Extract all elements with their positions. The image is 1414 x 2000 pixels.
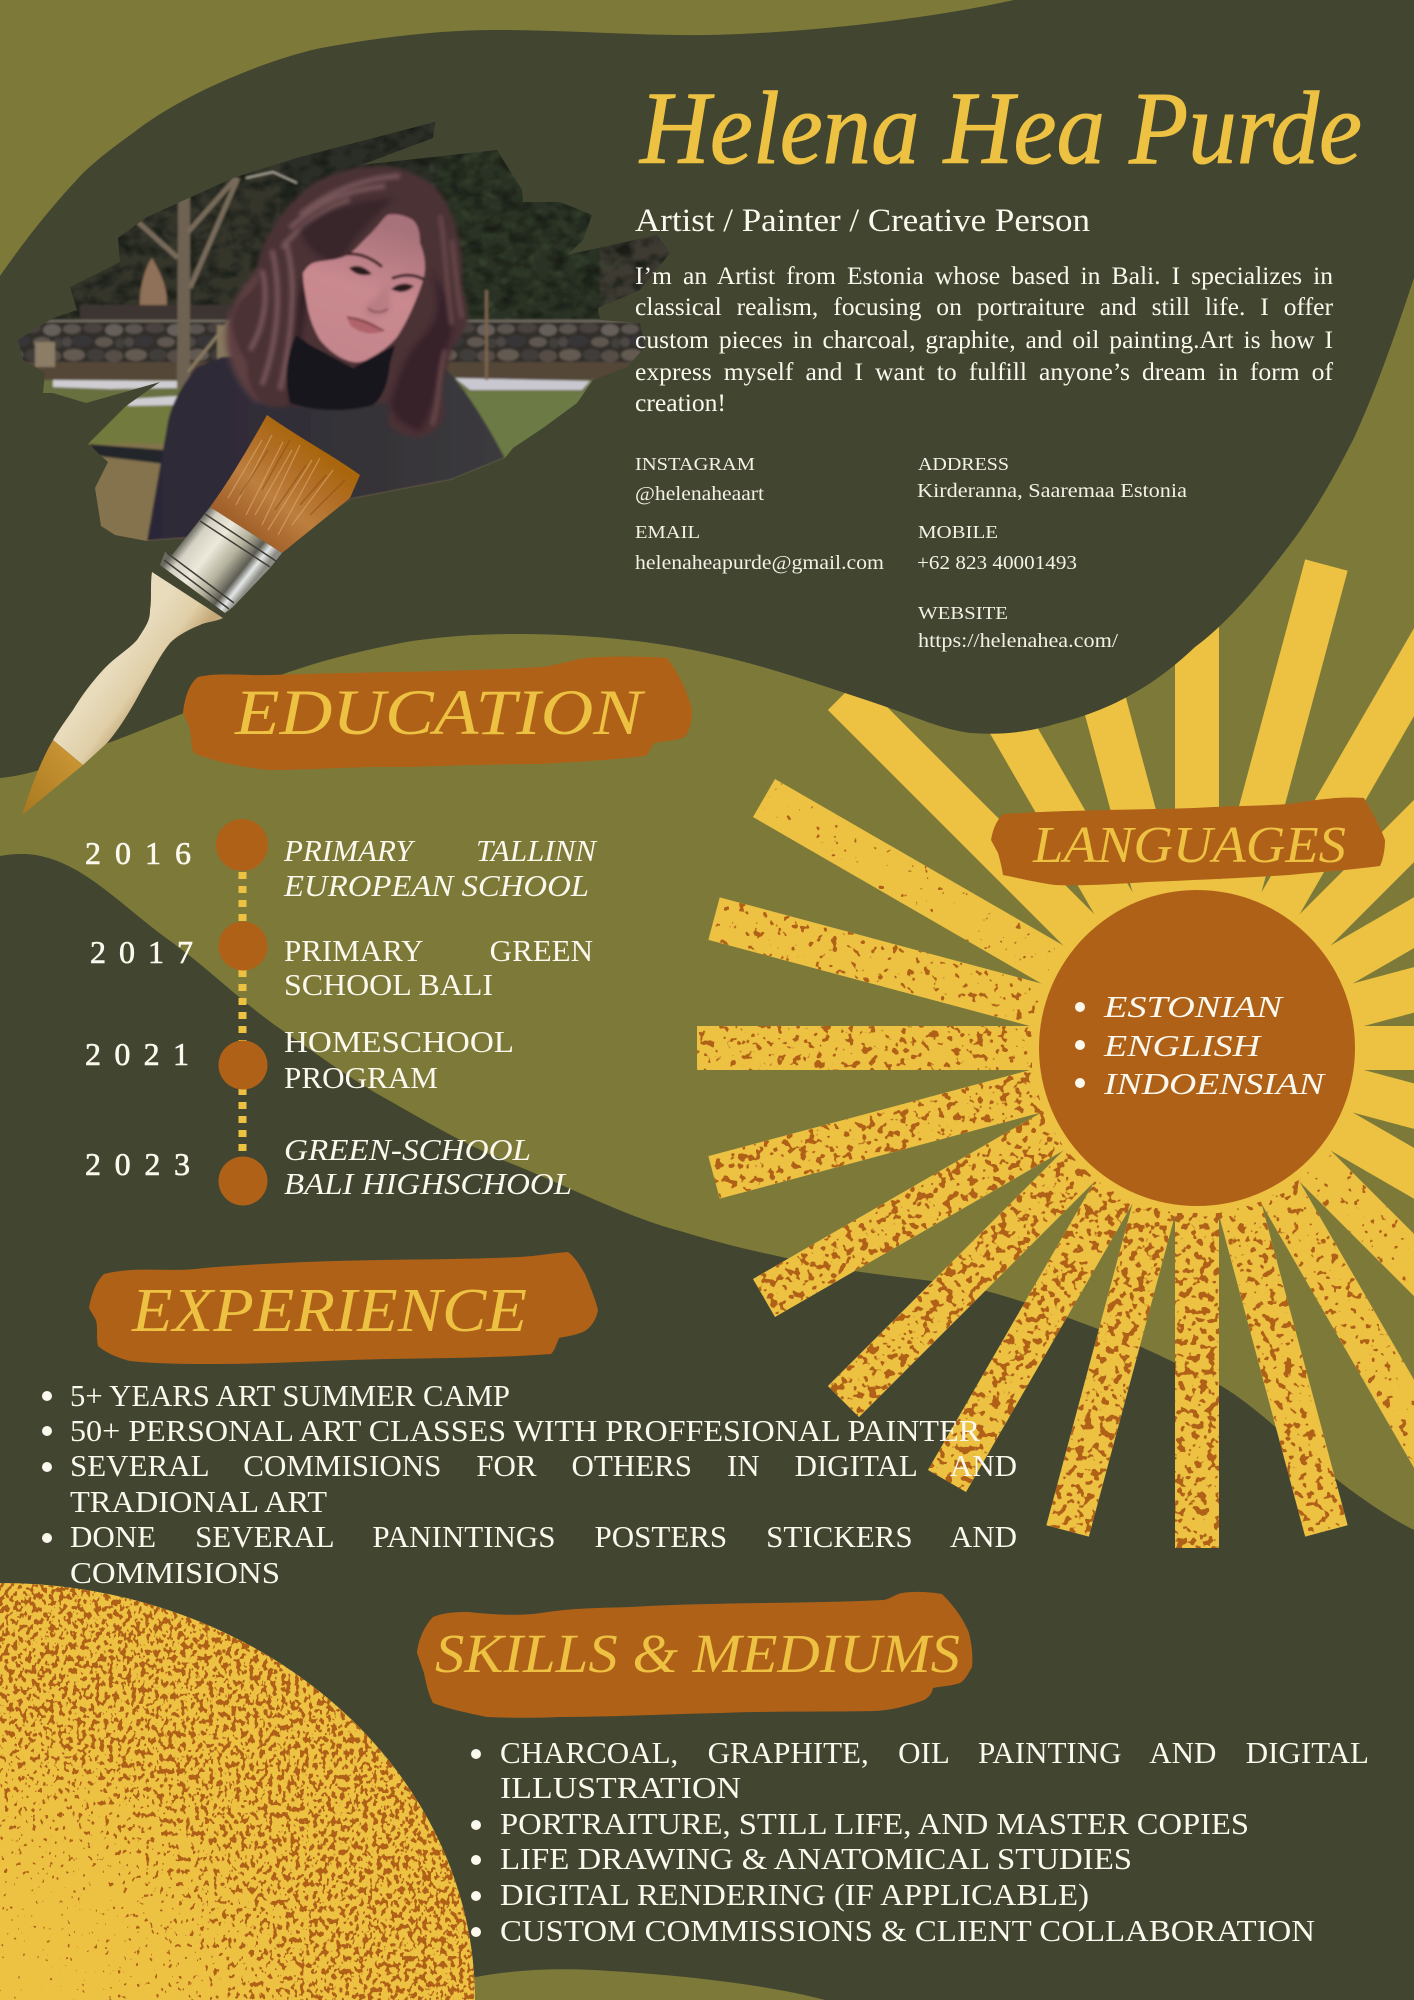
contact details: https://helenahea.com/ (918, 630, 1118, 652)
contact details (635, 454, 1187, 652)
text: creation! (635, 388, 726, 417)
skills heading (417, 1592, 972, 1718)
timeline years (85, 835, 193, 1182)
text: custom pieces in charcoal, graphite, and oil painting.Art is how I (635, 325, 1333, 354)
timeline schools: HOMESCHOOL (284, 1024, 514, 1059)
skills list: LIFE DRAWING & ANATOMICAL STUDIES (500, 1841, 1132, 1876)
experience heading (89, 1252, 598, 1364)
skills list: ILLUSTRATION (500, 1770, 741, 1805)
timeline dots (216, 819, 268, 1206)
paintbrush icon (22, 415, 360, 815)
timeline schools: EUROPEAN SCHOOL (283, 868, 589, 903)
portrait: sweater (147, 356, 505, 541)
background hump at bottom (470, 1969, 825, 2000)
timeline schools: PROGRAM (284, 1060, 438, 1095)
languages list: INDOENSIAN (1103, 1066, 1327, 1101)
name title: Helena Hea Purde (638, 71, 1362, 186)
subtitle: Artist / Painter / Creative Person (635, 203, 1090, 239)
skills heading: SKILLS & MEDIUMS (435, 1623, 960, 1684)
timeline years: 2016 (85, 835, 191, 871)
skills list: DIGITAL RENDERING (IF APPLICABLE) (500, 1877, 1089, 1912)
experience item: paintings: DONE SEVERAL PANINTINGS POSTERS STICKERS AND (70, 1519, 1017, 1554)
education heading (183, 656, 692, 770)
contact details: MOBILE (918, 522, 998, 542)
timeline connector (238, 872, 246, 1160)
experience item: commissions: SEVERAL COMMISIONS FOR OTHERS IN DIGITAL AND (70, 1448, 1017, 1483)
timeline schools: SCHOOL BALI (284, 967, 493, 1002)
timeline entry: primary green: PRIMARY GREEN (284, 933, 593, 968)
brush tip (22, 740, 83, 815)
languages list (1075, 989, 1327, 1101)
contact details: WEBSITE (918, 603, 1008, 623)
top dark blob (0, 0, 1414, 778)
timeline years: 2021 (85, 1036, 189, 1072)
experience list: TRADIONAL ART (70, 1484, 327, 1519)
skills item: charcoal: CHARCOAL, GRAPHITE, OIL PAINTING AND DIGITAL (500, 1735, 1369, 1770)
sun rays (697, 548, 1414, 1548)
contact details: INSTAGRAM (635, 454, 755, 474)
portrait: face (303, 214, 425, 362)
sun disc (1039, 890, 1355, 1206)
skills list (471, 1749, 1315, 1948)
experience list: 50+ PERSONAL ART CLASSES WITH PROFFESIONAL PAINTER (70, 1413, 980, 1448)
timeline schools: BALI HIGHSCHOOL (284, 1166, 572, 1201)
sun ray speckle texture (697, 779, 1414, 1548)
bottom-left textured sun (0, 1583, 475, 2000)
portrait: hair (226, 166, 468, 437)
experience list (42, 1378, 980, 1590)
timeline schools (283, 868, 589, 1201)
skills list: PORTRAITURE, STILL LIFE, AND MASTER COPIES (500, 1806, 1249, 1841)
languages heading: LANGUAGES (1032, 817, 1346, 874)
timeline years: 2023 (85, 1146, 190, 1182)
contact details: +62 823 40001493 (917, 552, 1077, 574)
contact details: helenaheapurde@gmail.com (635, 552, 884, 574)
languages list: ENGLISH (1103, 1028, 1262, 1063)
experience list: COMMISIONS (70, 1555, 280, 1590)
text: I’m an Artist from Estonia whose based in Bali. I specializes in (635, 261, 1333, 290)
tree (177, 196, 190, 387)
contact details: @helenaheaart (635, 483, 764, 505)
portrait: turtleneck (287, 335, 395, 410)
contact details: EMAIL (635, 522, 700, 542)
languages list: ESTONIAN (1103, 989, 1285, 1024)
timeline entry: primary tallinn: PRIMARY TALLINN (284, 833, 596, 868)
biography text (635, 261, 1334, 417)
experience heading: EXPERIENCE (131, 1277, 527, 1345)
timeline years: 2017 (90, 934, 193, 970)
contact details: ADDRESS (918, 454, 1009, 474)
experience list: 5+ YEARS ART SUMMER CAMP (70, 1378, 510, 1413)
languages heading (991, 797, 1385, 885)
skills list: CUSTOM COMMISSIONS & CLIENT COLLABORATION (500, 1913, 1315, 1948)
timeline schools: GREEN-SCHOOL (284, 1132, 531, 1167)
contact details: Kirderanna, Saaremaa Estonia (917, 480, 1187, 502)
text: classical realism, focusing on portraiture and still life. I offer (635, 292, 1333, 321)
text: express myself and I want to fulfill anyone’s dream in form of (635, 357, 1333, 386)
brush bristles (210, 415, 360, 553)
education heading: EDUCATION (234, 677, 646, 749)
background wave: lower dark band (0, 854, 1414, 2000)
brush handle (53, 572, 223, 765)
fence posts (35, 342, 55, 367)
brush ferrule (160, 507, 282, 613)
portrait photo in brush-stroke shape (18, 122, 670, 541)
